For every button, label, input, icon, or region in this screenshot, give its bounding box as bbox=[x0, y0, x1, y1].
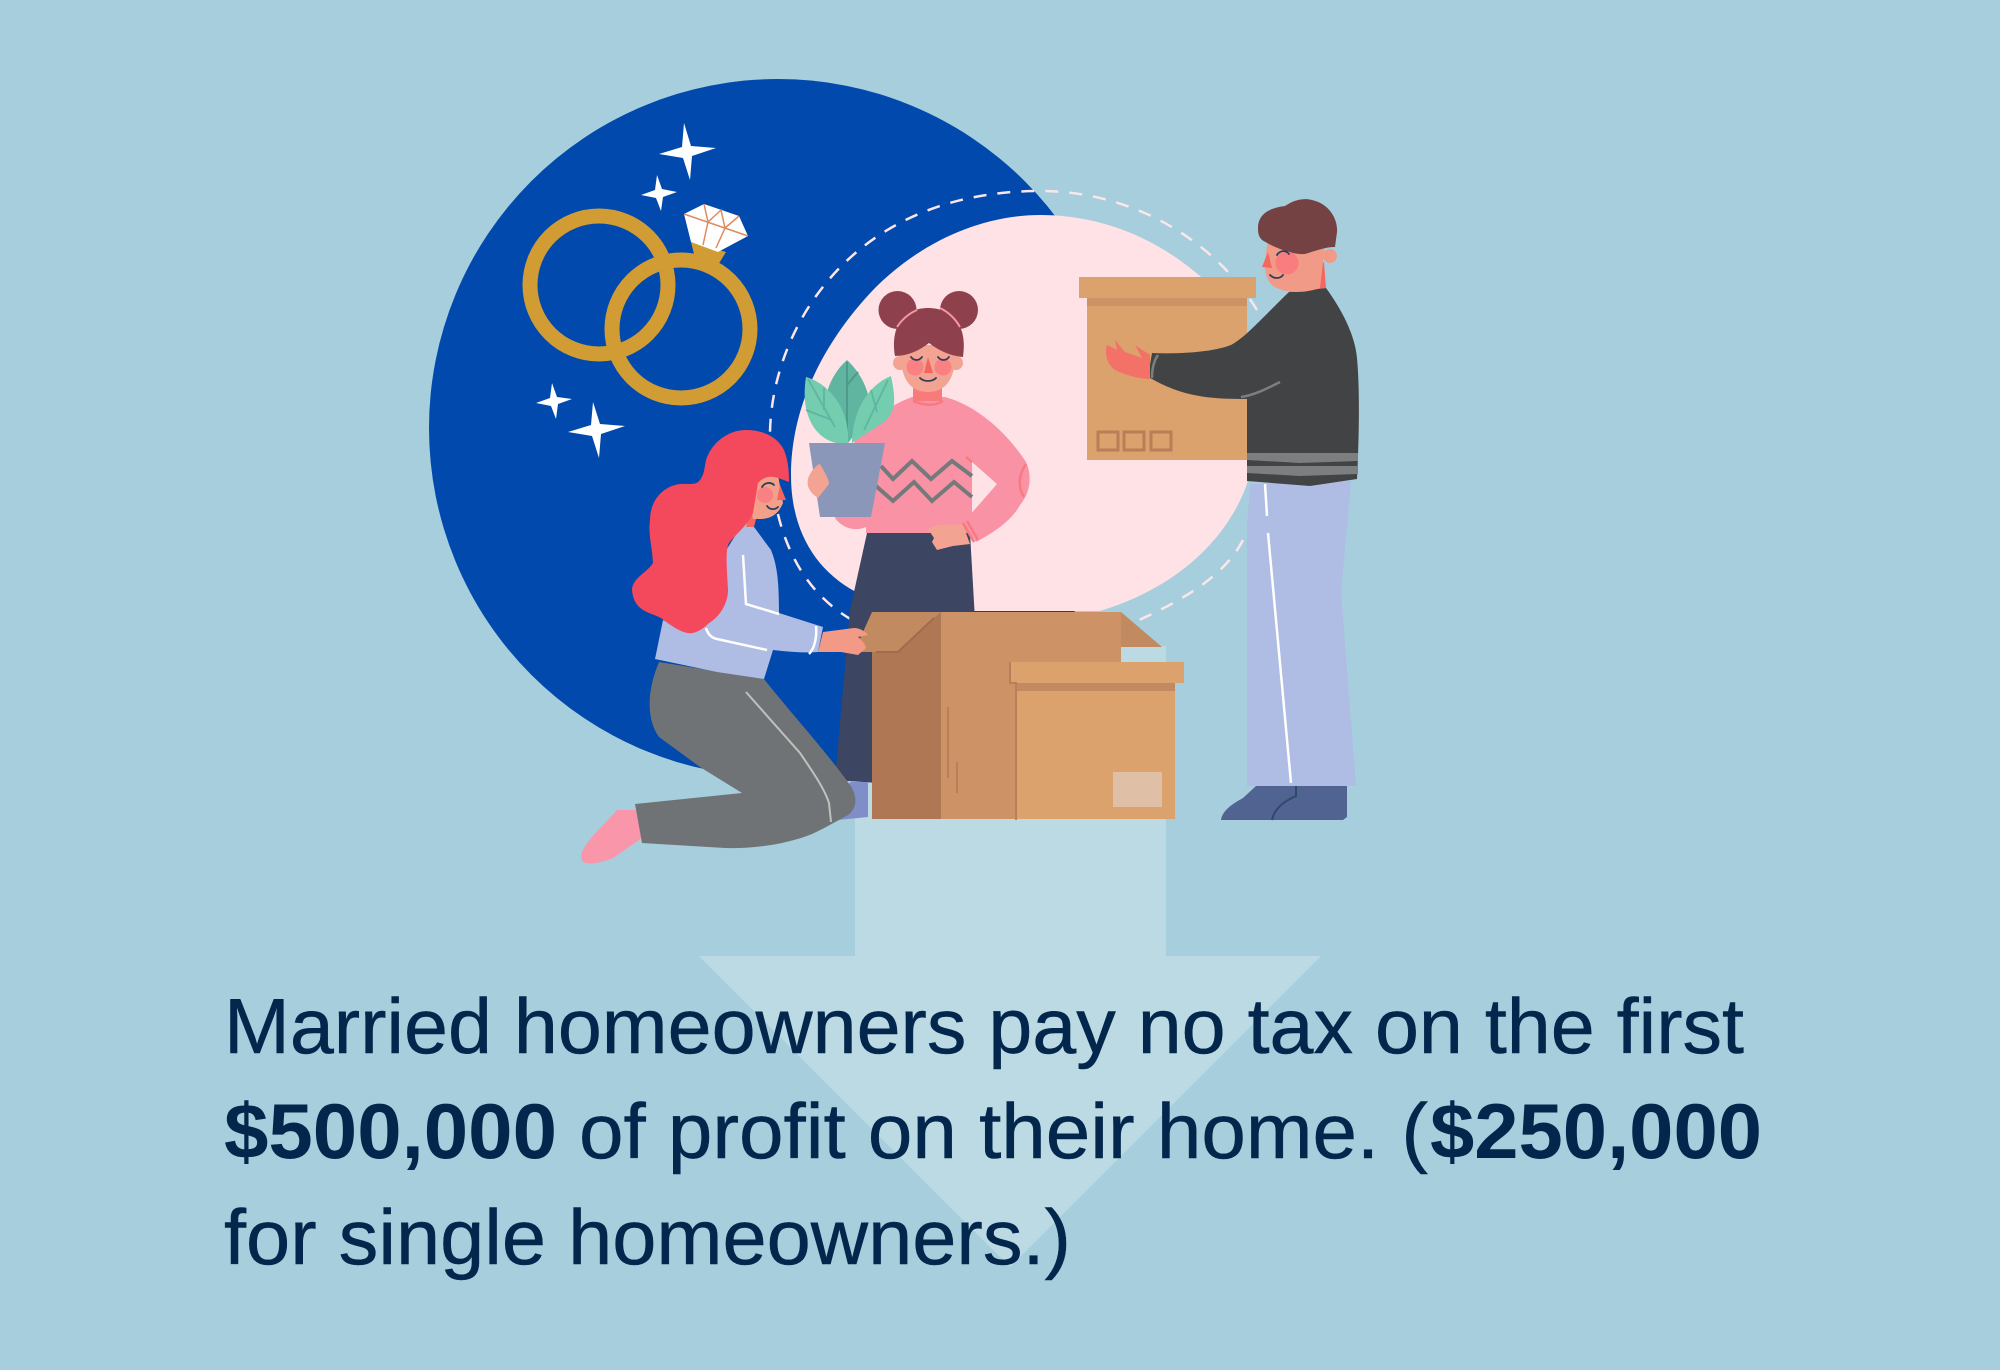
hair ties bbox=[897, 308, 960, 327]
ears bbox=[893, 356, 963, 370]
nose bbox=[1262, 252, 1272, 268]
sweater stripes bbox=[1247, 453, 1358, 476]
shoe bbox=[838, 782, 868, 820]
caption text bbox=[224, 982, 1762, 1281]
icon: sparkles bbox=[536, 123, 716, 458]
flap crease bbox=[876, 618, 934, 652]
leaf vein bbox=[847, 362, 858, 430]
line 2 bold amount: $500,000 bbox=[224, 1087, 557, 1175]
kneeling woman bbox=[581, 430, 868, 863]
plant pot bbox=[809, 443, 885, 517]
hand bbox=[818, 628, 868, 655]
zigzag pattern bbox=[876, 461, 972, 501]
line 3: for single homeowners.) bbox=[224, 1193, 1071, 1281]
box label bbox=[1113, 772, 1162, 807]
left flap bbox=[854, 612, 941, 652]
box creases bbox=[948, 707, 957, 793]
diamond bbox=[684, 204, 748, 252]
leaf back bbox=[827, 360, 871, 443]
pants bbox=[1247, 481, 1356, 786]
hair bbox=[632, 430, 789, 633]
top seams bbox=[706, 555, 816, 654]
line 1: Married homeowners pay no tax on the first bbox=[224, 982, 1744, 1070]
leaf veins bbox=[806, 379, 888, 430]
neck bbox=[913, 385, 942, 401]
ear bbox=[1323, 249, 1337, 263]
box lid bbox=[1079, 277, 1256, 298]
box shadow band bbox=[1087, 298, 1247, 306]
held box bbox=[1079, 277, 1256, 460]
neck bbox=[746, 515, 757, 527]
standing woman with plant bbox=[805, 291, 1030, 820]
hand on pot bbox=[808, 464, 829, 498]
hair bbox=[1258, 199, 1337, 254]
eye and smile bbox=[762, 483, 778, 509]
sleeve details bbox=[1152, 355, 1280, 397]
ring setting bbox=[691, 242, 726, 265]
side panel bbox=[872, 612, 941, 819]
buns bbox=[878, 291, 978, 329]
diamond facets bbox=[684, 204, 748, 248]
line 2 regular: of profit on their home. ( bbox=[579, 1087, 1428, 1175]
hair bbox=[894, 308, 964, 357]
box edge bbox=[1010, 662, 1016, 820]
leaf right bbox=[852, 376, 894, 443]
face bbox=[1265, 240, 1325, 292]
cheeks bbox=[906, 358, 952, 376]
line 2 bold amount second: $250,000 bbox=[1430, 1087, 1762, 1175]
sweater bbox=[835, 397, 1030, 542]
nose bbox=[924, 357, 933, 373]
hand bbox=[1106, 340, 1150, 379]
eye and smile bbox=[1270, 251, 1289, 278]
pink blob bbox=[791, 215, 1251, 611]
front panel bbox=[941, 612, 1121, 819]
pants bbox=[635, 662, 855, 848]
box body bbox=[1087, 298, 1247, 460]
big open box bbox=[854, 612, 1162, 819]
neck bbox=[1285, 262, 1326, 292]
leaf left bbox=[805, 377, 848, 443]
man holding box bbox=[1079, 199, 1359, 820]
face bbox=[901, 345, 955, 392]
box lid bbox=[1010, 662, 1184, 683]
down arrow bbox=[699, 646, 1321, 1267]
ring left bbox=[530, 216, 668, 354]
box squares bbox=[1098, 432, 1171, 450]
pants seam bbox=[1265, 484, 1291, 783]
sweater details bbox=[963, 457, 1026, 542]
skirt bbox=[835, 533, 975, 790]
dashed circle outline bbox=[770, 191, 1272, 624]
pants seam bbox=[746, 692, 831, 822]
nose bbox=[777, 485, 786, 500]
ring right bbox=[612, 260, 750, 398]
eyes and smile bbox=[911, 357, 949, 381]
small box bbox=[1010, 662, 1184, 820]
right flap bbox=[1121, 612, 1162, 647]
cheek bbox=[757, 487, 773, 503]
collar bbox=[913, 401, 943, 405]
foot bbox=[581, 810, 642, 863]
icon: wedding rings bbox=[530, 204, 750, 398]
hand on hip bbox=[928, 524, 970, 550]
blue circle bbox=[429, 79, 1127, 777]
shoes bbox=[1221, 786, 1347, 820]
face bbox=[744, 475, 783, 519]
top bbox=[655, 520, 823, 679]
shoe divider bbox=[1272, 786, 1296, 820]
box body bbox=[1017, 683, 1175, 819]
sweater bbox=[1148, 288, 1359, 486]
cheek bbox=[1276, 252, 1298, 274]
box shadow band bbox=[1017, 683, 1175, 691]
